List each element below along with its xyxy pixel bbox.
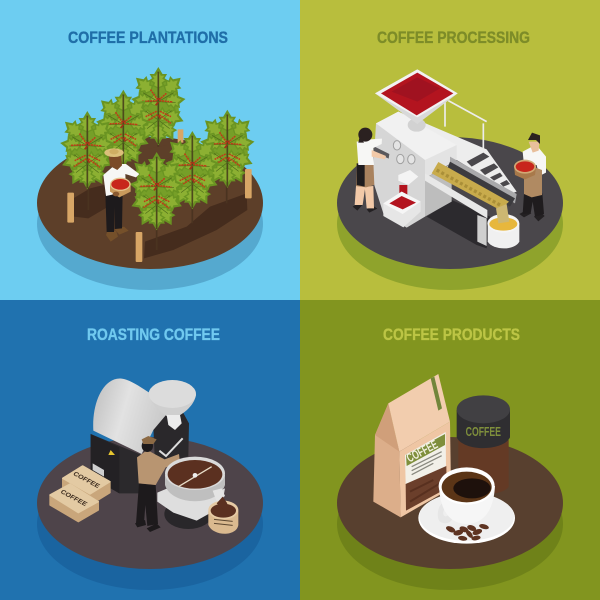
- illustration: products: [373, 374, 515, 544]
- tree: [164, 131, 221, 209]
- illustration: coffee trees and farmer: [59, 67, 256, 262]
- disc: roastery floor: [37, 437, 263, 590]
- worker: woman: [353, 128, 386, 213]
- worker: man: [514, 133, 546, 221]
- farmer: [103, 148, 139, 242]
- hopper: [375, 69, 458, 132]
- saucer: [418, 492, 515, 544]
- lever: [159, 438, 183, 456]
- bucket: [487, 204, 519, 248]
- heading: coffee processing: COFFEE PROCESSING: [377, 29, 530, 47]
- tree: [199, 110, 256, 188]
- roaster worker: [135, 436, 180, 532]
- gauges: [393, 141, 415, 164]
- bag: COFFEE: [404, 437, 440, 465]
- heading: coffee products: COFFEE PRODUCTS: [383, 326, 520, 344]
- conveyor: [425, 157, 517, 246]
- heading: roasting coffee: ROASTING COFFEE: [87, 326, 220, 344]
- coffee sack: [208, 497, 238, 534]
- tree: [130, 67, 187, 145]
- machine base: [91, 434, 142, 493]
- illustration: roaster: [50, 379, 238, 534]
- post: [245, 169, 252, 198]
- disc: factory floor: [337, 137, 563, 290]
- panel: roasting coffee: [0, 300, 300, 600]
- drum: [93, 379, 166, 454]
- funnel: [148, 380, 196, 430]
- panel: coffee processing: [300, 0, 600, 300]
- bag: [373, 374, 451, 517]
- heading: coffee plantations: COFFEE PLANTATIONS: [68, 29, 228, 47]
- stairs: [467, 153, 510, 187]
- tree: [95, 90, 152, 168]
- cup: [438, 467, 495, 524]
- jar: COFFEE: [466, 425, 501, 439]
- jar: [457, 395, 510, 494]
- panel: coffee products: [300, 300, 600, 600]
- post: [136, 232, 142, 262]
- cooling tray: [157, 457, 225, 529]
- sacks: COFFEE: [71, 471, 101, 490]
- disc: table: [337, 437, 563, 590]
- sacks: [50, 466, 110, 522]
- post: [67, 193, 74, 223]
- sacks: COFFEE: [59, 489, 89, 508]
- disc: plantation ground: [37, 137, 263, 290]
- red output box: [383, 170, 421, 227]
- tree: [128, 152, 185, 230]
- control panel: [373, 146, 389, 159]
- illustration: processing machine: [353, 69, 546, 248]
- coffee beans: [445, 523, 489, 541]
- panel: coffee plantations: [0, 0, 300, 300]
- back plate: [153, 410, 189, 463]
- tree: [59, 111, 116, 189]
